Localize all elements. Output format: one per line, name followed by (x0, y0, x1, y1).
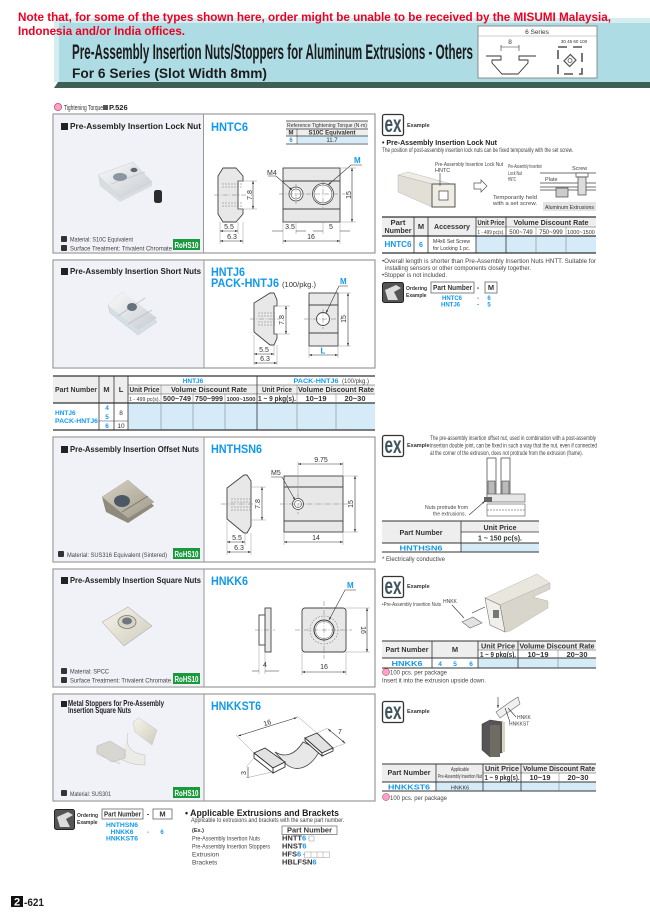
ordering example: Part Number (433, 283, 472, 292)
table: HNKK6 pricing: Part Number (386, 645, 429, 654)
tightening torque note: P.526 (109, 103, 128, 112)
figure: extrusion with HNKK (443, 574, 550, 632)
drawing: HNTC6 side view (214, 168, 257, 244)
drawing: HNTHSN6 side view: 7.8 (255, 499, 262, 509)
table: HNTC6 pricing: 6 (419, 242, 423, 249)
table: HNKK6 pricing: M (452, 645, 458, 654)
table: HNTJ6 pricing: PACK-HNTJ6 (55, 418, 98, 425)
RoHS badge (173, 548, 200, 559)
table: HNTC6 pricing: Part (390, 218, 406, 227)
table: HNKK6 pricing (382, 641, 596, 668)
series inset diagram (478, 26, 597, 78)
icon: ex: Example (407, 443, 430, 449)
table: HNTJ6 pricing: 4 (105, 405, 109, 412)
description: The position of post-assembly insertion lock nuts can be fixed temporarily with the set screw. (382, 147, 573, 154)
ordering example: bottom: Example (77, 820, 98, 826)
table: HNTJ6 pricing: L (119, 385, 124, 394)
heading: square nuts: Pre-Assembly Insertion Square Nuts (70, 575, 201, 585)
figure: corner section: the extrusions. (433, 512, 466, 518)
ordering example: bottom: - (147, 810, 150, 818)
table: HNTHSN6 pricing (382, 521, 539, 552)
table: HNKK6 pricing: 20~30 (566, 650, 588, 659)
part numbers HNTJ6: PACK-HNTJ6 (211, 276, 279, 290)
figure: section view: Screw (572, 166, 587, 172)
notes: 100 pcs. per package (390, 670, 447, 676)
table: HNTC6 pricing: 750~999 (539, 230, 563, 236)
torque table (286, 121, 368, 144)
table: HNTJ6 pricing: 8 (119, 410, 123, 417)
material notes (61, 668, 171, 684)
applicable extrusions and brackets: Extrusion (192, 852, 219, 858)
table: HNKK6 pricing: 6 (469, 661, 473, 668)
figure: extrusion with HNKK: HNKK (443, 599, 458, 605)
table: HNTJ6 pricing: Unit Price (262, 385, 292, 394)
heading: stoppers: Metal Stoppers for Pre-Assembly (68, 698, 164, 708)
part numbers HNTJ6: HNTJ6 (211, 265, 245, 279)
page number: -621 (24, 897, 44, 909)
ordering example: bottom: HNKKST6 (106, 836, 139, 842)
availability note: Indonesia and/or India offices. (18, 24, 185, 38)
RoHS badge (173, 239, 200, 250)
example panel: offset nut (382, 432, 597, 563)
table: HNTC6 pricing: for Locking 1 pc. (433, 246, 470, 252)
table: HNTC6 pricing: Number (384, 226, 412, 235)
applicable extrusions and brackets: HFS6 - (282, 850, 306, 858)
ordering example: bottom: Part Number (104, 810, 141, 818)
note: package: 100 pcs. per package (390, 795, 447, 802)
table: HNTJ6 pricing: 10 (117, 423, 125, 430)
heading: offset nuts: Pre-Assembly Insertion Offset Nuts (70, 444, 199, 454)
drawing: HNTHSN6 front view: 15 (348, 500, 355, 508)
table: HNTJ6 pricing: PACK-HNTJ6 (294, 378, 339, 385)
drawing: HNTHSN6 front view (271, 457, 358, 545)
drawing: HNTJ6 side view: 6.3 (260, 356, 270, 363)
table: HNTC6 pricing: 1000~1500 (567, 230, 595, 236)
subtitle: For 6 Series (Slot Width 8mm) (72, 66, 267, 81)
table: HNTHSN6 pricing: Part Number (400, 528, 443, 537)
figure: extrusion with stopper: HNKK (517, 715, 532, 721)
drawing: HNKK6 front view: 16 (320, 664, 328, 671)
ordering example: bottom: M (159, 810, 166, 818)
figure: section view: Pre-Assembly Insertion (508, 164, 542, 170)
ordering example: - (477, 302, 479, 308)
table: HNTC6 pricing (382, 217, 596, 253)
drawing: HNTHSN6 side view: 6.3 (234, 545, 244, 552)
tightening torque note (54, 103, 128, 112)
panel: HNTHSN6 offset nuts (53, 437, 375, 562)
drawing: HNTJ6 side view: 7.8 (279, 315, 286, 325)
icon: ex: Example (407, 709, 430, 715)
table: HNTC6 pricing: 500~749 (509, 230, 533, 236)
figure: section view: Plate (545, 177, 558, 183)
table: HNKKST6 pricing: Unit Price (485, 764, 519, 773)
table: HNTC6 pricing: M4x6 Set Screw (433, 239, 470, 245)
example panel: square nut (382, 573, 596, 684)
drawing: HNKK6 side view (252, 608, 279, 674)
table: HNTJ6 pricing (53, 376, 375, 430)
table: HNKKST6 pricing: 1 ~ 9 pkg(s). (484, 773, 520, 782)
table: HNTJ6 pricing: Volume Discount Rate (298, 385, 374, 394)
RoHS badge: RoHS10 (174, 550, 199, 559)
ordering example: bottom: - (147, 830, 149, 836)
photo: square nut (102, 607, 152, 646)
drawing: stopper (236, 716, 346, 778)
figure: section view: Aluminum Extrusions (545, 205, 594, 211)
table: HNTJ6 pricing: M (103, 385, 110, 394)
table: HNKKST6 pricing: Applicable (451, 767, 469, 773)
drawing: HNTJ6 side view (250, 293, 290, 365)
table: HNTJ6 pricing: Unit Price (130, 385, 160, 394)
table: HNTJ6 pricing: Volume Discount Rate (171, 385, 247, 394)
table: HNKK6 pricing: 10~19 (527, 650, 549, 659)
notes (382, 258, 597, 279)
drawing: HNTC6 front view (267, 156, 362, 244)
icon: ex: ex (384, 573, 402, 599)
photo: offset nut (102, 480, 154, 523)
series inset diagram: 30 45 60 100 (561, 39, 588, 44)
table: HNTJ6 pricing: 1 - 499 pc(s). (129, 397, 160, 403)
table: HNTJ6 pricing: 5 (105, 414, 109, 421)
material notes: Material: S10C Equivalent (70, 236, 133, 244)
figure: extrusion with stopper: HNKKST (509, 722, 529, 728)
figure: section view (492, 164, 596, 211)
header band (54, 18, 650, 88)
drawing: HNTJ6 front view (304, 277, 351, 358)
material notes: Surface Treatment: Trivalent Chromate (70, 678, 171, 684)
heading: stoppers (61, 698, 164, 715)
part number HNKKST6: HNKKST6 (211, 699, 261, 713)
drawing: HNTC6 side view: 5.5 (224, 224, 234, 231)
table: HNTC6 pricing: Accessory (434, 222, 471, 231)
description: at the corner of the extrusion, does not protrude from the extrusion (frame). (430, 450, 583, 457)
drawing: stopper: 7 (338, 729, 342, 736)
drawing: HNKK6 front view: M (347, 581, 354, 590)
table: HNKKST6 pricing: Part Number (388, 768, 431, 777)
ordering example: bottom: Ordering (77, 813, 98, 819)
ordering example: - (477, 283, 480, 292)
ordering example: Ordering (406, 286, 427, 292)
photo: short nut (108, 292, 157, 335)
torque table: Reference Tightening Torque (N·m) (287, 123, 367, 129)
panel: HNTJ6 short nuts (53, 260, 375, 368)
applicable extrusions and brackets: Pre-Assembly Insertion Stoppers (192, 844, 271, 850)
figure: section view: Lock Nut (508, 171, 522, 177)
availability note: Note that, for some of the types shown here, order might be unable to be received by the MISUMI Malaysia, (18, 10, 611, 24)
material note: Material: SUS316 Equivalent (Sintered) (67, 552, 167, 559)
applicable extrusions and brackets: Part Number (287, 826, 332, 834)
table: HNTHSN6 pricing: 1 ~ 150 pc(s). (478, 534, 522, 542)
ordering example: 6 (487, 296, 491, 302)
ordering example (382, 282, 497, 308)
drawing: HNTJ6 front view: M (340, 277, 347, 286)
material note: Material: SUS301 (70, 791, 111, 798)
icon: ex: ex (384, 432, 402, 458)
label: insertion nuts: •Pre-Assembly Insertion Nuts (382, 602, 441, 608)
icon: ex (382, 573, 430, 599)
drawing: HNTC6 front view: 5 (329, 224, 333, 231)
table: HNTJ6 pricing: Part Number (55, 385, 97, 394)
panel: HNKKST6 stoppers (53, 694, 375, 801)
table: HNKK6 pricing: Unit Price (481, 642, 515, 650)
notes: •Stopper is not included. (382, 272, 447, 279)
table: HNTC6 pricing: HNTC6 (384, 240, 412, 249)
drawing: HNTC6 front view: 15 (346, 191, 353, 199)
heading: short nuts: Pre-Assembly Insertion Short Nuts (70, 266, 201, 276)
drawing: HNTC6 front view: 16 (307, 234, 315, 241)
ordering example: bottom: HNTHSN6 (106, 823, 139, 829)
icon: ex: ex (384, 698, 402, 724)
figure: section view: Temporarily held (493, 195, 537, 201)
ordering example: HNTC6 (442, 296, 463, 302)
torque table: 11.7 (326, 138, 338, 144)
applicable extrusions and brackets: HNTT6 - (282, 834, 311, 842)
ordering example: bottom (54, 809, 172, 842)
note: package (382, 794, 447, 802)
description (430, 435, 597, 457)
panel: HNTC6 lock nut (53, 114, 375, 253)
ordering example: Example (406, 293, 427, 299)
table: HNKKST6 pricing (382, 764, 596, 792)
drawing: HNTJ6 front view: L (321, 346, 326, 356)
part number HNKK6: HNKK6 (211, 574, 248, 588)
notes (382, 668, 486, 684)
table: HNTJ6 pricing: 20~30 (344, 394, 366, 403)
table: HNKK6 pricing: HNKK6 (392, 659, 422, 668)
table: HNTJ6 pricing: HNTJ6 (183, 378, 204, 385)
example panel: lock nut (382, 111, 597, 308)
figure: section view: with a set screw. (492, 201, 538, 207)
arrow (474, 180, 487, 192)
table: HNKKST6 pricing: 10~19 (529, 773, 551, 782)
drawing: HNTHSN6 side view: 5.5 (232, 535, 242, 542)
figure: extrusion with stopper (482, 697, 532, 757)
torque table: M (288, 130, 294, 136)
figure: extrusion with lock nut: Pre-Assembly Insertion Lock Nut (435, 162, 503, 168)
drawing: HNTHSN6 front view: M5 (271, 470, 281, 477)
table: HNKK6 pricing: 4 (438, 661, 442, 668)
icon: ex: Example (407, 123, 430, 129)
RoHS badge: RoHS10 (174, 789, 199, 798)
ordering example: 5 (487, 302, 491, 308)
part numbers HNTJ6 (211, 265, 316, 290)
photo: stopper (97, 718, 157, 765)
heading: example lock nut: • Pre-Assembly Insertion Lock Nut (382, 138, 497, 147)
drawing: HNTHSN6 side view (221, 475, 266, 555)
figure: section view: HNTC (508, 177, 516, 183)
notes: installing sensors or other components closely together. (385, 265, 531, 272)
ordering example: bottom: 6 (160, 830, 164, 836)
drawing: HNKK6 side view: 4 (263, 662, 267, 669)
heading: lock nut: Pre-Assembly Insertion Lock Nut (70, 121, 201, 131)
icon: ex: Example (407, 584, 430, 590)
table: HNTJ6 pricing: 500~749 (163, 394, 191, 403)
table: HNKK6 pricing: 5 (453, 661, 457, 668)
table: HNKK6 pricing: Volume Discount Rate (520, 642, 594, 650)
drawing: HNKK6 front view: 16 (359, 626, 366, 634)
table: HNTC6 pricing: Volume Discount Rate (514, 218, 588, 227)
drawing: HNTC6 front view: 3.5 (285, 224, 295, 231)
icon: ex (382, 111, 430, 137)
heading: stoppers: Insertion Square Nuts (68, 705, 131, 715)
drawing: stopper: 3 (241, 771, 248, 775)
applicable extrusions and brackets: (Ex.) (192, 828, 204, 834)
table: HNTC6 pricing: 1 - 499 pc(s). (478, 230, 504, 236)
table: HNTC6 pricing: M (418, 222, 424, 231)
material notes (61, 236, 172, 252)
applicable extrusions and brackets: HNST6 (282, 842, 307, 850)
table: HNTJ6 pricing: 750~999 (195, 394, 223, 403)
applicable extrusions and brackets: HBLFSN6 (282, 858, 317, 866)
applicable extrusions and brackets (185, 808, 344, 866)
applicable extrusions and brackets: • Applicable Extrusions and Brackets (185, 808, 339, 818)
torque table: S10C Equivalent (308, 130, 356, 136)
ordering example: - (477, 296, 479, 302)
figure: corner section (425, 458, 525, 518)
table: HNTJ6 pricing: 1000~1500 (226, 397, 256, 403)
material note (61, 790, 111, 798)
notes: •Overall length is shorter than Pre-Assembly Insertion Nuts HNTT. Suitable for (382, 258, 597, 265)
table: HNKKST6 pricing: 20~30 (567, 773, 589, 782)
drawing: HNTC6 side view: 6.3 (227, 234, 237, 241)
note: electrically conductive: * Electrically conductive (382, 556, 445, 563)
table: HNKKST6 pricing: HNKK6 (451, 786, 469, 792)
table: HNKKST6 pricing: HNKKST6 (388, 782, 430, 792)
figure: corner section: Nuts protrude from (425, 505, 468, 511)
table: HNTHSN6 pricing: HNTHSN6 (400, 544, 442, 552)
drawing: HNTC6 side view: 7.8 (247, 190, 254, 200)
table: HNTJ6 pricing: 1 ~ 9 pkg(s). (258, 394, 296, 403)
drawing: HNTC6 front view: M4 (267, 170, 277, 177)
part numbers HNTJ6: (100/pkg.) (282, 280, 316, 289)
availability note (18, 10, 611, 38)
drawing: stopper: 16 (263, 719, 272, 728)
notes: Insert it into the extrusion upside down. (382, 678, 486, 684)
RoHS badge: RoHS10 (174, 675, 199, 684)
panel: HNKK6 square nuts (53, 569, 375, 687)
drawing: HNKK6 front view (295, 581, 370, 675)
table: HNTJ6 pricing: (100/pkg.) (342, 379, 369, 385)
tightening torque note: Tightening Torque (64, 105, 103, 112)
table: HNTJ6 pricing: 10~19 (305, 394, 327, 403)
table: HNKK6 pricing: 1 ~ 9 pkg(s). (480, 650, 516, 659)
example panel: stopper (382, 697, 596, 802)
page number: 2 (14, 896, 20, 908)
ordering example: M (488, 283, 494, 292)
icon: ex (382, 432, 430, 458)
table: HNKKST6 pricing: Pre-Assembly Insertion Nut (438, 774, 482, 780)
figure: extrusion with lock nut (398, 162, 503, 207)
RoHS badge (173, 673, 200, 684)
table: HNTJ6 pricing: HNTJ6 (55, 410, 76, 417)
material notes: Material: SPCC (70, 668, 109, 676)
drawing: HNTJ6 side view: 5.5 (259, 347, 269, 354)
drawing: HNTHSN6 front view: 9.75 (314, 457, 328, 464)
part number HNTHSN6: HNTHSN6 (211, 442, 262, 456)
torque table: 6 (289, 138, 293, 144)
RoHS badge: RoHS10 (174, 241, 199, 250)
part number HNTC6: HNTC6 (211, 120, 248, 134)
applicable extrusions and brackets: Pre-Assembly Insertion Nuts (192, 836, 261, 842)
table: HNTHSN6 pricing: Unit Price (484, 523, 516, 532)
applicable extrusions and brackets: Applicable to extrusions and brackets with the same part number. (191, 817, 344, 824)
table: HNTJ6 pricing: 6 (105, 423, 109, 430)
icon: ex (382, 698, 430, 724)
table: HNKKST6 pricing: Volume Discount Rate (523, 764, 595, 773)
drawing: HNTHSN6 front view: 14 (312, 535, 320, 542)
series inset diagram: 6 Series (525, 29, 550, 36)
series inset diagram: 8 (508, 39, 512, 46)
figure: extrusion with lock nut: HNTC (435, 168, 450, 174)
table: HNTC6 pricing: Unit Price (478, 218, 504, 227)
applicable extrusions and brackets: Brackets (192, 860, 218, 866)
photo: lock nut and set screw (98, 162, 162, 203)
drawing: HNTC6 front view: M (354, 156, 361, 165)
drawing: HNTJ6 front view: 15 (341, 315, 348, 323)
ordering example: HNTJ6 (441, 302, 461, 308)
ordering example: bottom: HNKK6 (110, 830, 134, 836)
RoHS badge (173, 787, 200, 798)
page number (11, 896, 44, 909)
icon: ex: ex (384, 111, 402, 137)
material notes: Surface Treatment: Trivalent Chromate (70, 246, 172, 252)
